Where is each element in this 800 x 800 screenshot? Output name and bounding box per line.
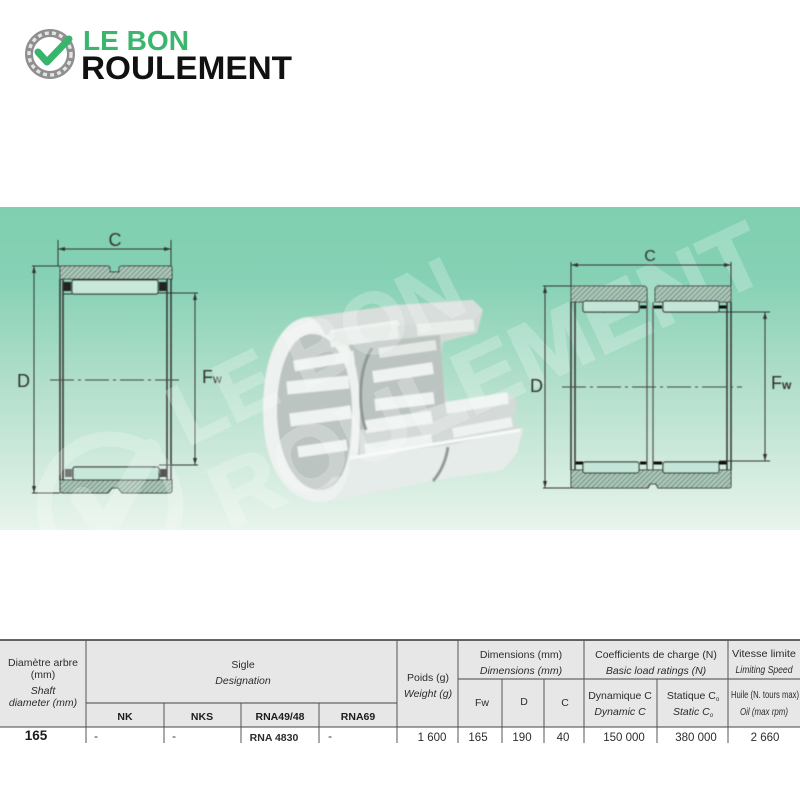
- table grid: [0, 640, 800, 743]
- column header: designation: NKS: [191, 711, 213, 723]
- data row: 2 660: [751, 732, 779, 744]
- column header: dimensions: C: [561, 697, 569, 709]
- bearing body: [263, 300, 523, 502]
- column header: load ratings: Dynamique C: [588, 690, 652, 702]
- dimension labels: [17, 230, 222, 391]
- column header: load ratings: Coefficients de charge (N): [595, 649, 717, 661]
- column header: dimensions: Dimensions (mm): [480, 665, 562, 677]
- banner background: [0, 207, 800, 530]
- column header: designation: NK: [117, 711, 133, 723]
- dimension labels: Fw: [771, 373, 792, 393]
- column header: shaft diameter: (mm): [31, 669, 55, 681]
- column header: load ratings: [588, 649, 720, 719]
- column header: load ratings: o: [710, 713, 714, 719]
- dimension labels: C: [108, 230, 122, 250]
- front ring: [263, 317, 360, 502]
- column header: designation: RNA49/48: [255, 711, 305, 723]
- dimension labels: C: [644, 248, 656, 265]
- data row: 380 000: [675, 732, 717, 744]
- column header: shaft diameter: Diamètre arbre: [8, 657, 78, 669]
- dimension labels: [530, 248, 792, 396]
- specification table: [0, 640, 800, 744]
- data row: -: [172, 731, 176, 743]
- watermark icon: [38, 432, 182, 496]
- technical drawing: double row bearing: [530, 248, 792, 488]
- data row: [25, 728, 779, 744]
- dimension labels: D: [530, 376, 543, 396]
- technical drawing: single row bearing: [17, 230, 222, 493]
- column header: dimensions: Dimensions (mm): [480, 649, 562, 661]
- column header: load ratings: o: [716, 697, 720, 703]
- data row: 150 000: [603, 732, 645, 744]
- column header: dimensions: D: [520, 696, 528, 708]
- groove: [433, 447, 448, 481]
- column header: limiting speed: Vitesse limite: [732, 648, 796, 660]
- upper sleeve: [310, 300, 483, 335]
- logo text: roulement: ROULEMENT: [81, 50, 292, 86]
- column header: load ratings: Dynamic C: [594, 706, 646, 718]
- column header: shaft diameter: diameter (mm): [9, 697, 77, 709]
- column header: weight: [404, 672, 452, 700]
- column header: weight: Poids (g): [407, 672, 449, 684]
- needle rollers: [287, 325, 512, 452]
- data row: 190: [512, 732, 532, 744]
- cage ring: [361, 348, 372, 430]
- data row: RNA 4830: [250, 732, 298, 744]
- column header: designation: [117, 659, 375, 723]
- logo: [29, 25, 292, 86]
- table header background: [0, 640, 800, 727]
- inner shadow: [274, 330, 350, 490]
- 3D bearing cutaway illustration: [263, 300, 523, 502]
- logo text: le bon: LE BON: [83, 25, 189, 56]
- column header: weight: Weight (g): [404, 688, 452, 700]
- watermark text: le bon: LE BON: [153, 240, 478, 464]
- data row: -: [328, 731, 332, 743]
- data row: 1 600: [418, 732, 446, 744]
- lower sleeve: [330, 428, 523, 502]
- dimension labels: D: [17, 371, 30, 391]
- column header: dimensions: [475, 649, 569, 709]
- column header: limiting speed: [731, 648, 799, 718]
- column header: load ratings: Statique C: [667, 690, 716, 702]
- column header: load ratings: Basic load ratings (N): [606, 665, 706, 677]
- column header: shaft diameter: Shaft: [31, 685, 56, 697]
- column header: load ratings: Static C: [673, 706, 710, 718]
- data row: 165: [25, 728, 48, 743]
- data row: -: [94, 731, 98, 743]
- column header: designation: RNA69: [341, 711, 375, 723]
- data row: 40: [557, 732, 569, 744]
- data row: 165: [468, 732, 488, 744]
- column header: designation: Sigle: [231, 659, 255, 671]
- column header: dimensions: Fw: [475, 697, 489, 709]
- column header: shaft diameter: [8, 657, 78, 709]
- column header: designation: Designation: [215, 675, 271, 687]
- watermark text: roulement: ROULEMENT: [194, 204, 780, 548]
- dimension labels: Fw: [202, 367, 222, 387]
- icon: bearing with check mark: [29, 33, 71, 75]
- watermark: [38, 220, 753, 496]
